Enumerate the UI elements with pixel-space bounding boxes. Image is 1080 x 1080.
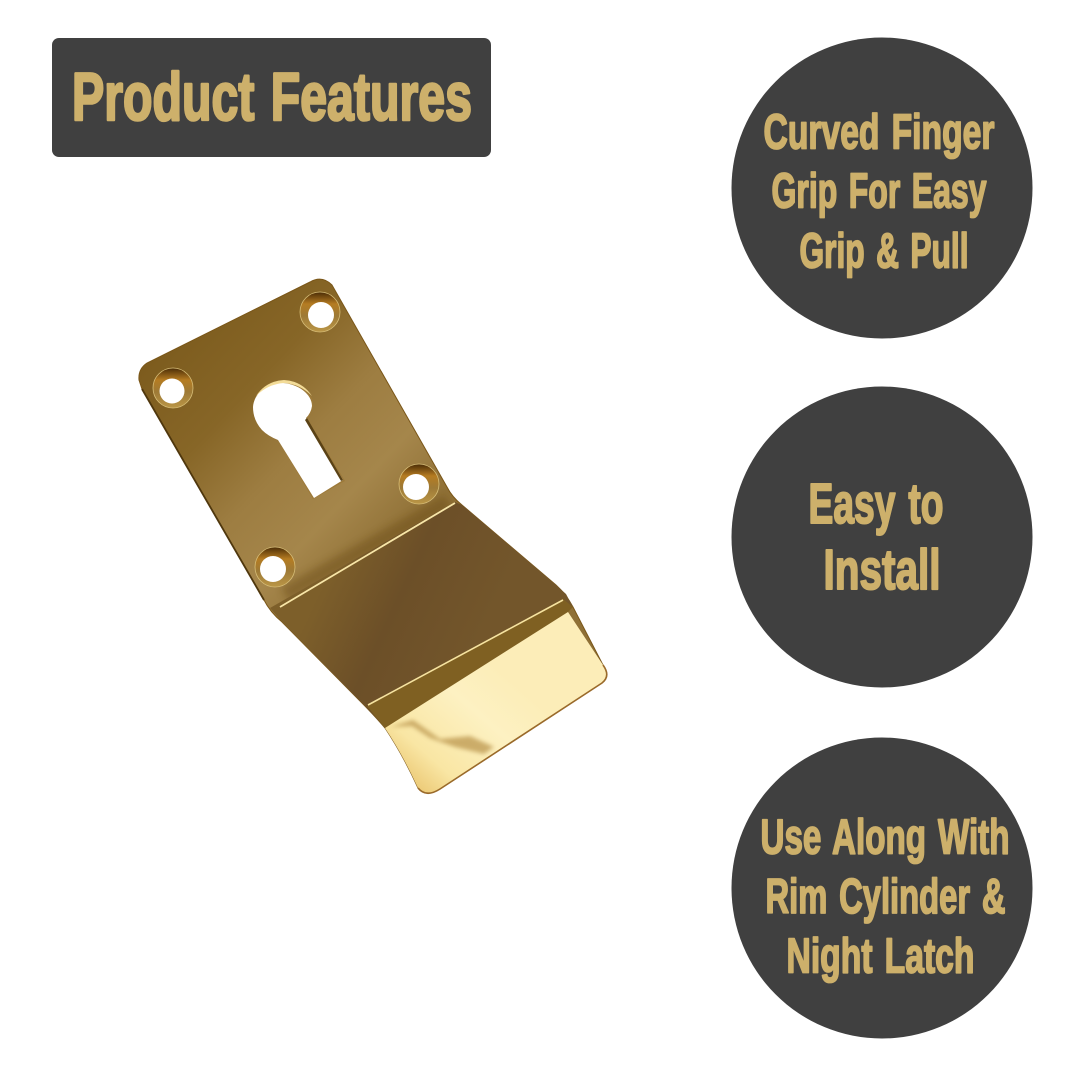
lower fold band (367, 599, 573, 728)
keyhole inner shadow (305, 418, 343, 481)
title banner (52, 38, 491, 157)
feature circle: rim cylinder and night latch (732, 738, 1032, 1038)
feature circle: curved finger grip: Grip & Pull (800, 224, 968, 278)
screw hole top left (153, 368, 193, 408)
screw hole bottom right (399, 464, 439, 504)
title text: Product Features (72, 59, 472, 135)
feature circle: easy to install: Install (824, 538, 940, 602)
keyhole (253, 380, 345, 499)
fold shadow band (285, 502, 448, 594)
lower fold highlight (368, 600, 563, 705)
product photo: brass cylinder pull (139, 279, 607, 793)
plate body (139, 279, 607, 793)
screw hole bottom left (255, 547, 295, 587)
feature circle: rim cylinder and night latch: Night Latch (786, 930, 974, 984)
lip rim (418, 665, 607, 793)
left edge shading (142, 389, 264, 600)
curved finger grip section (270, 502, 573, 728)
feature circle: easy to install (732, 386, 1032, 688)
screw hole top right (300, 292, 340, 332)
feature circle: easy to install: Easy to (808, 472, 944, 536)
lip reflection (390, 720, 494, 754)
bright pull lip (385, 612, 607, 793)
upper fold highlight (280, 503, 455, 607)
feature circle: curved finger grip (732, 38, 1032, 338)
keyhole highlight (256, 380, 312, 396)
